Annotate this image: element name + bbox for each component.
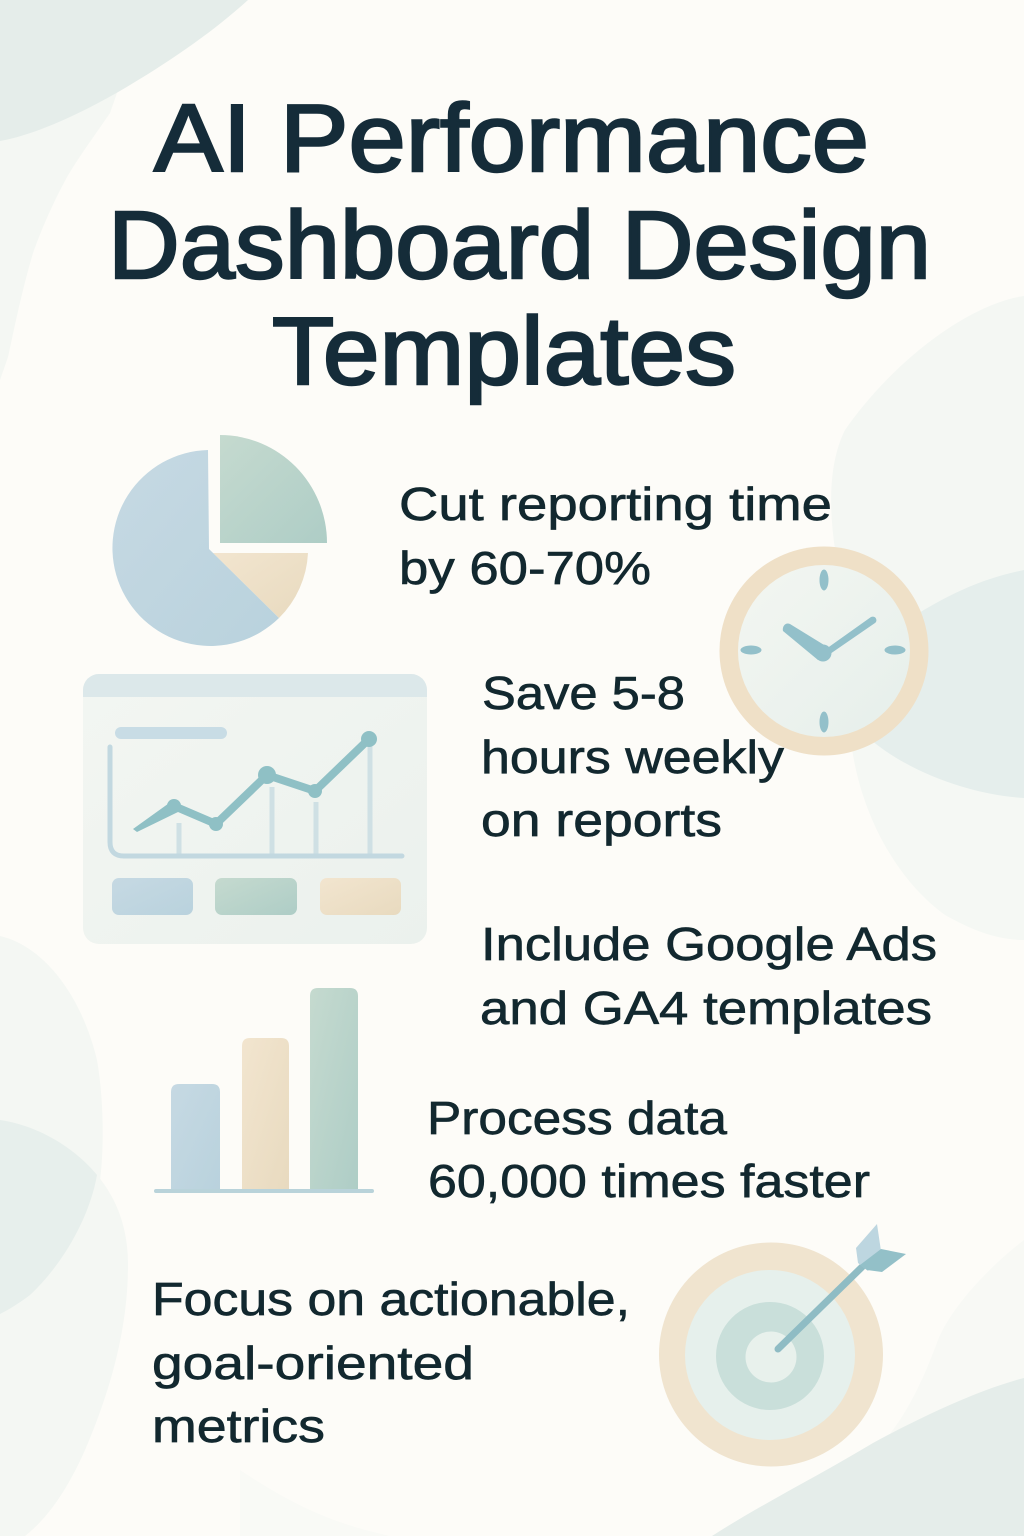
- icon: target with arrow: [659, 1224, 906, 1466]
- text: focus metrics: Focus on actionable,: [152, 1273, 630, 1325]
- text: reporting time: [399, 478, 832, 594]
- text: focus metrics: [152, 1273, 630, 1452]
- text: save hours: hours weekly: [481, 731, 784, 783]
- text: save hours: on reports: [481, 794, 722, 846]
- icon: bar chart: [154, 988, 374, 1193]
- text: templates: and GA4 templates: [480, 982, 932, 1034]
- text: templates: [480, 918, 937, 1034]
- text: save hours: [481, 667, 784, 846]
- title: [108, 85, 931, 405]
- text: reporting time: Cut reporting time: [399, 478, 832, 530]
- text: process data: Process data: [427, 1092, 727, 1144]
- text: focus metrics: metrics: [152, 1400, 325, 1452]
- text: reporting time: by 60-70%: [399, 542, 651, 594]
- text: templates: Include Google Ads: [481, 918, 937, 970]
- text: process data: 60,000 times faster: [428, 1155, 870, 1207]
- line chart: [133, 731, 377, 832]
- title: Dashboard Design: [108, 192, 931, 299]
- text: save hours: Save 5-8: [482, 667, 685, 719]
- text: focus metrics: goal-oriented: [152, 1337, 474, 1389]
- icon: clock: [720, 546, 928, 756]
- icon: pie chart: [112, 435, 327, 646]
- text: process data: [427, 1092, 870, 1207]
- title: Templates: [272, 298, 736, 405]
- icon: dashboard window: [83, 674, 427, 944]
- title: AI Performance: [154, 85, 869, 192]
